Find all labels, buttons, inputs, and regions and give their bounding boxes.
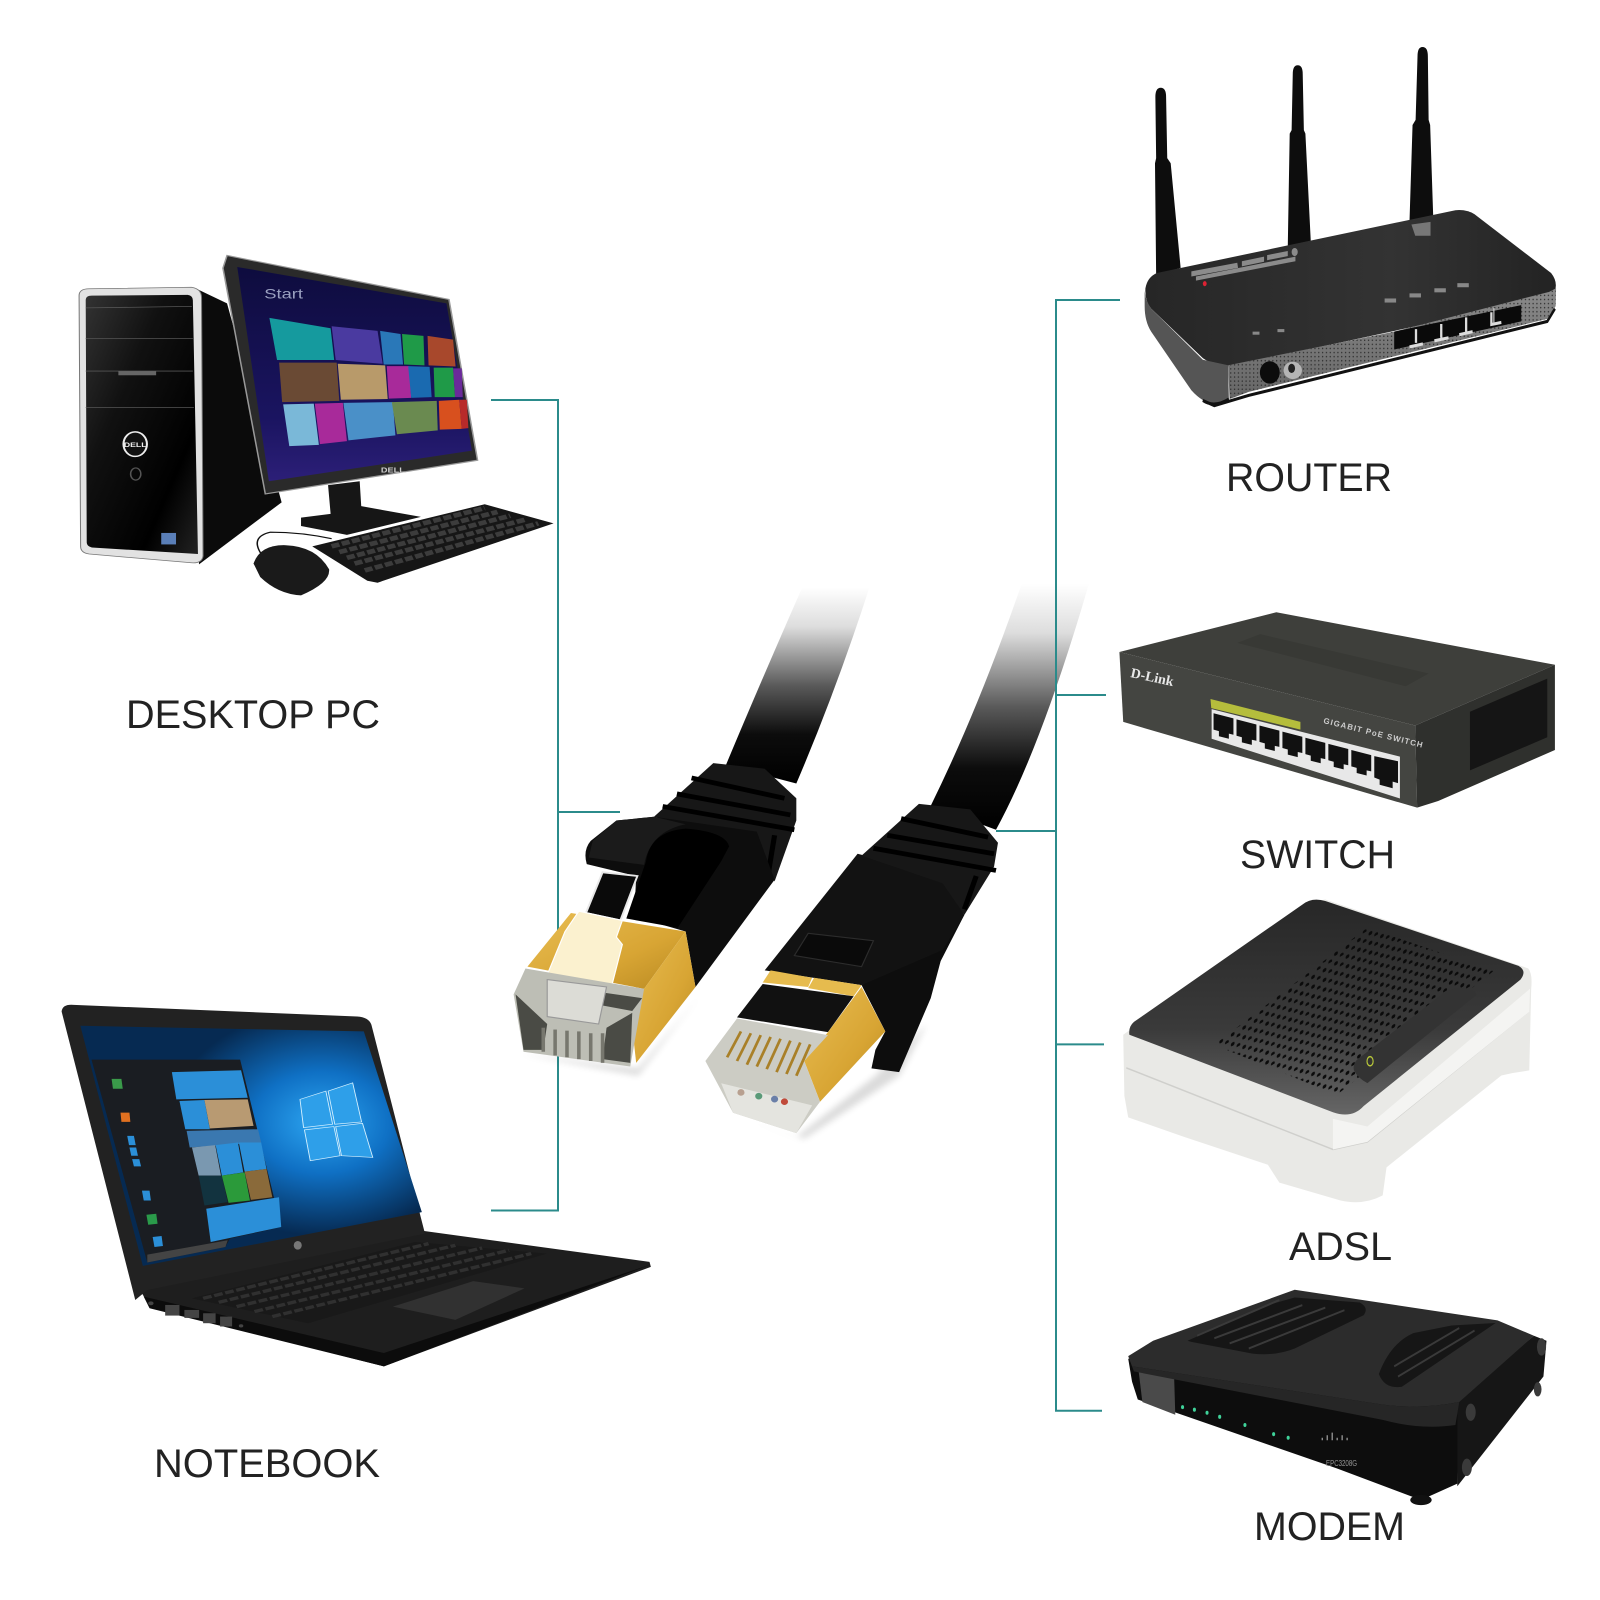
- switch text: model: GIGABIT PoE SWITCH: [1323, 716, 1425, 750]
- black insert: [737, 984, 854, 1032]
- desktop pc: [79, 255, 554, 595]
- status leds: [1181, 1405, 1290, 1440]
- notebook: [62, 1005, 651, 1366]
- router top: [1145, 210, 1556, 366]
- label: adsl: ADSL: [1289, 1225, 1392, 1269]
- adsl: [1123, 899, 1532, 1202]
- right hook loop: [862, 915, 964, 1072]
- dell badge: DELL: [124, 441, 147, 449]
- label: desktop pc: DESKTOP PC: [126, 693, 380, 737]
- clear head: [514, 968, 644, 1067]
- tiles: [269, 318, 468, 446]
- poe strip: [1210, 699, 1300, 730]
- router front: [1228, 288, 1556, 399]
- window: [794, 933, 873, 967]
- right plug body: [765, 854, 964, 985]
- modem side: [1455, 1336, 1546, 1486]
- screen text: Start: [264, 287, 304, 302]
- screen: [80, 1026, 422, 1266]
- knobs: [1462, 1338, 1546, 1476]
- mouse: [254, 545, 329, 595]
- modem top: [1128, 1290, 1534, 1407]
- gold side: [804, 987, 885, 1102]
- latch tab: [545, 911, 622, 991]
- coloured wires: [737, 1089, 788, 1105]
- model text: EPC3208G: [1326, 1458, 1357, 1468]
- laptop base: [138, 1230, 651, 1366]
- right strain relief: [862, 804, 998, 915]
- modem front: [1128, 1359, 1457, 1500]
- left strain relief: [654, 763, 796, 882]
- router side: [1145, 291, 1229, 404]
- vent: [1470, 679, 1547, 770]
- right plug: [705, 804, 998, 1133]
- white base: [1123, 899, 1532, 1202]
- gold shield top: [527, 913, 686, 989]
- start menu: [92, 1060, 281, 1263]
- left connector lines: [491, 400, 620, 1210]
- monitor stand: [301, 481, 421, 535]
- latch: [586, 872, 637, 920]
- router ports: [1394, 305, 1521, 349]
- laptop front edge: [144, 1265, 651, 1366]
- modem: [1128, 1290, 1546, 1505]
- keyboard: [312, 504, 554, 583]
- vent dots: [1214, 928, 1494, 1095]
- RJ45 plugs: [514, 763, 998, 1139]
- switch: [1119, 612, 1555, 808]
- label: switch: SWITCH: [1240, 833, 1395, 877]
- router top labels: [1191, 248, 1298, 281]
- led panel: [1354, 988, 1476, 1083]
- power jacks: [1260, 361, 1280, 384]
- left plug: [514, 763, 796, 1067]
- left vent: [1188, 1297, 1366, 1354]
- right connector lines: [996, 300, 1120, 1411]
- keyboard: [192, 1242, 547, 1323]
- windows logo: [300, 1083, 373, 1161]
- tower side: [196, 289, 282, 564]
- flat ethernet cable ribbons: [726, 584, 1089, 830]
- label: notebook: NOTEBOOK: [154, 1442, 380, 1486]
- mouse cable: [257, 532, 332, 554]
- gold shield side: [630, 932, 695, 1063]
- label: modem: MODEM: [1254, 1505, 1405, 1549]
- antennas: [1155, 47, 1433, 276]
- start tiles: [112, 1070, 281, 1247]
- label: router: ROUTER: [1226, 456, 1392, 500]
- router: [1145, 47, 1556, 406]
- laptop ports: [148, 1301, 243, 1328]
- touchpad: [393, 1281, 525, 1320]
- tower front: [79, 287, 203, 563]
- monitor logo: DELL: [381, 467, 405, 474]
- modem lip: [1132, 1366, 1459, 1427]
- dell badge: [123, 432, 147, 456]
- lid: [62, 1005, 425, 1300]
- plug shadow: [520, 994, 927, 1139]
- right vent: [1379, 1323, 1496, 1387]
- taskbar: [147, 1240, 228, 1263]
- foot: [1410, 1495, 1432, 1505]
- hp logo: [294, 1241, 302, 1250]
- gold strips: [763, 970, 812, 987]
- switch top: [1119, 612, 1555, 726]
- black top: [1129, 900, 1523, 1115]
- monitor: [223, 255, 478, 494]
- switch front: [1119, 652, 1417, 808]
- cisco mark: [1322, 1433, 1347, 1440]
- left plug body: [585, 817, 775, 987]
- switch ports: [1212, 709, 1400, 798]
- switch side: [1415, 665, 1555, 808]
- clear head: [705, 1018, 828, 1133]
- switch text: brand: D-Link: [1129, 666, 1175, 690]
